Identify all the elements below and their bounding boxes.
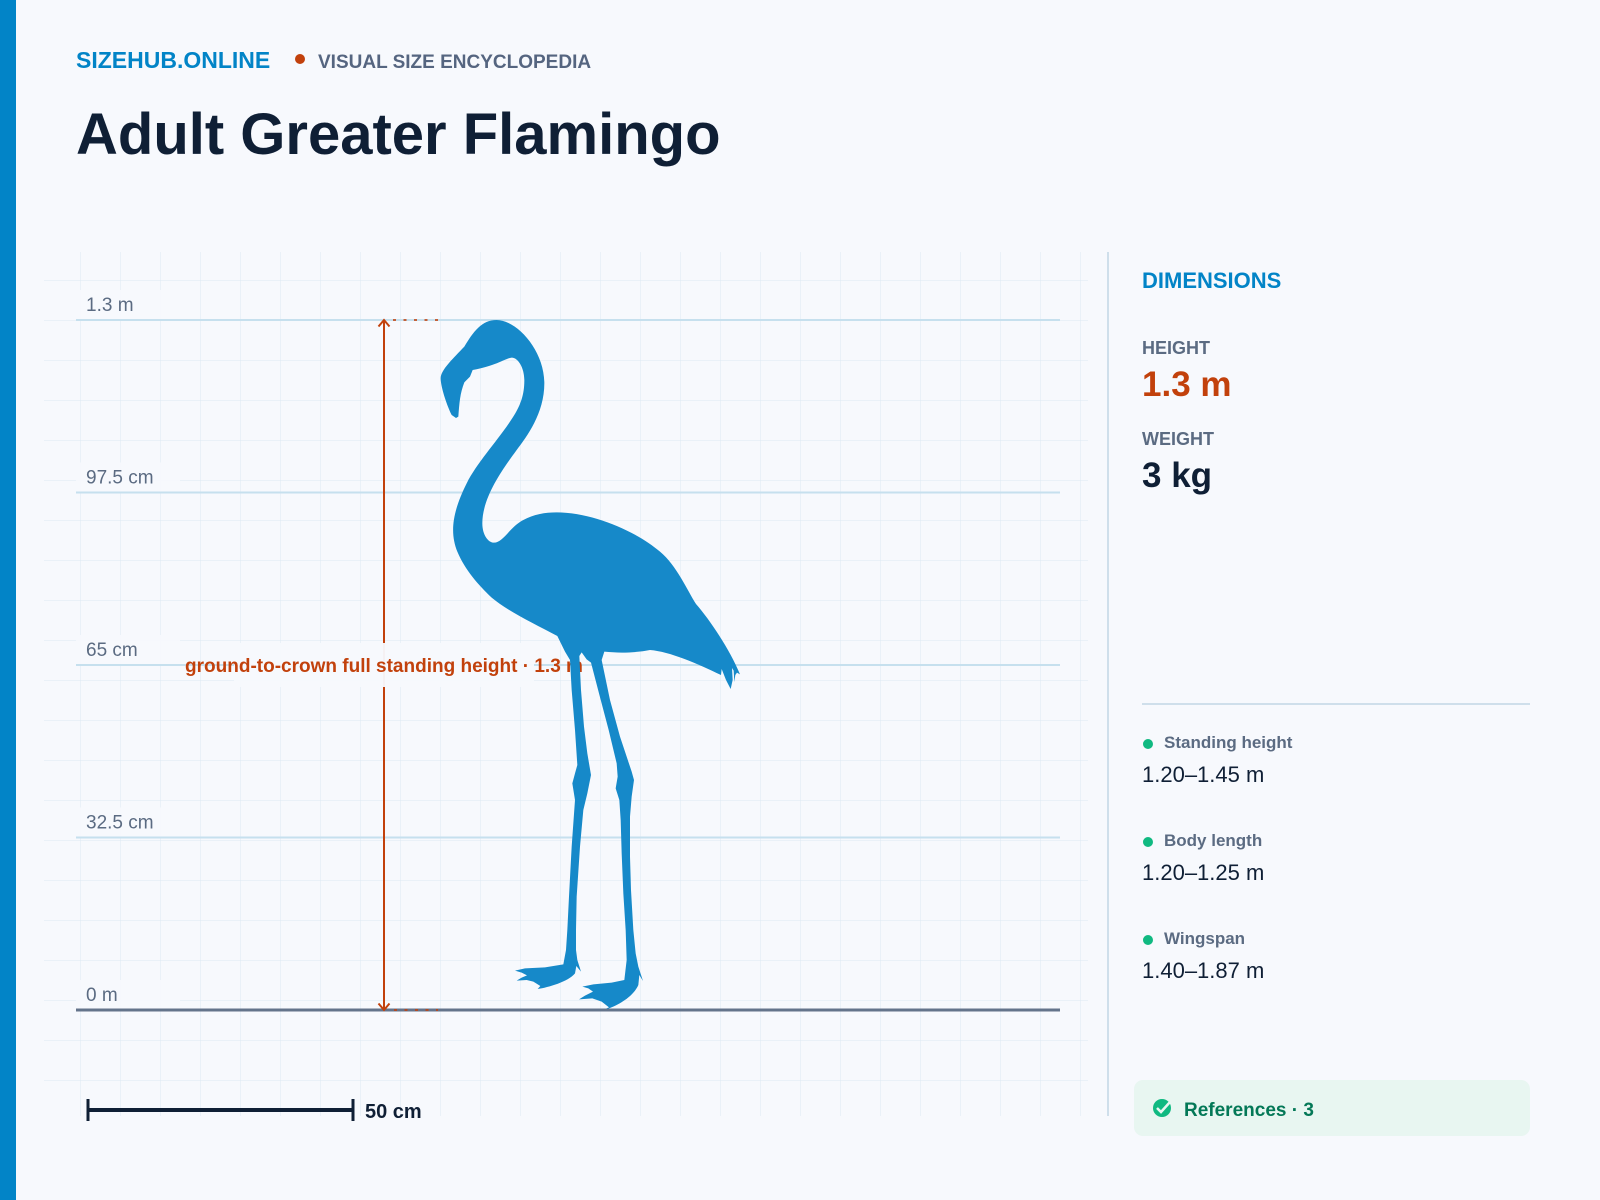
flamingo silhouette	[441, 320, 740, 1009]
references badge: References · 3	[1184, 1100, 1314, 1121]
height annotation label: ground-to-crown full standing height · 1.3 m	[185, 656, 583, 677]
arrow: height measure	[378, 320, 438, 1010]
chart: height scale	[44, 252, 1088, 1123]
height annotation label	[185, 643, 583, 687]
height stat: 1.3 m	[1142, 365, 1232, 404]
range: wingspan	[1142, 929, 1264, 983]
range: standing height: Standing height	[1164, 733, 1293, 752]
icon: check circle	[1153, 1099, 1171, 1117]
range: wingspan: Wingspan	[1164, 929, 1245, 948]
range: body length: Body length	[1164, 831, 1262, 850]
range: body length: 1.20–1.25 m	[1142, 860, 1264, 885]
weight stat: 3 kg	[1142, 456, 1212, 495]
sidebar divider	[1107, 252, 1109, 1116]
panel: dimensions	[1142, 268, 1281, 495]
header brand line: VISUAL SIZE ENCYCLOPEDIA	[318, 52, 591, 73]
references badge	[1134, 1080, 1530, 1136]
weight stat: WEIGHT	[1142, 429, 1214, 449]
range: body length	[1142, 831, 1264, 885]
scale labels	[86, 295, 154, 1006]
title: Adult Greater Flamingo	[76, 102, 721, 167]
header brand line: SIZEHUB.ONLINE	[76, 47, 270, 73]
weight stat	[1142, 429, 1214, 495]
heading: DIMENSIONS	[1142, 268, 1281, 293]
range: standing height	[1142, 733, 1293, 787]
scale bar: 50 cm	[365, 1101, 422, 1123]
ground line	[76, 1008, 1060, 1012]
header brand line	[76, 47, 591, 73]
range: standing height: 1.20–1.45 m	[1142, 762, 1264, 787]
scale labels: 65 cm	[86, 640, 138, 661]
height stat: HEIGHT	[1142, 338, 1210, 358]
height stat	[1142, 338, 1232, 404]
range: wingspan: 1.40–1.87 m	[1142, 958, 1264, 983]
scale labels: 97.5 cm	[86, 468, 154, 488]
scale labels: 1.3 m	[86, 295, 134, 316]
panel: ranges	[1142, 704, 1530, 983]
scale labels: 32.5 cm	[86, 812, 154, 834]
accent bar	[0, 0, 16, 1200]
scale guide lines	[76, 320, 1060, 838]
scale labels backing	[76, 290, 180, 1009]
scale labels: 0 m	[86, 985, 118, 1006]
